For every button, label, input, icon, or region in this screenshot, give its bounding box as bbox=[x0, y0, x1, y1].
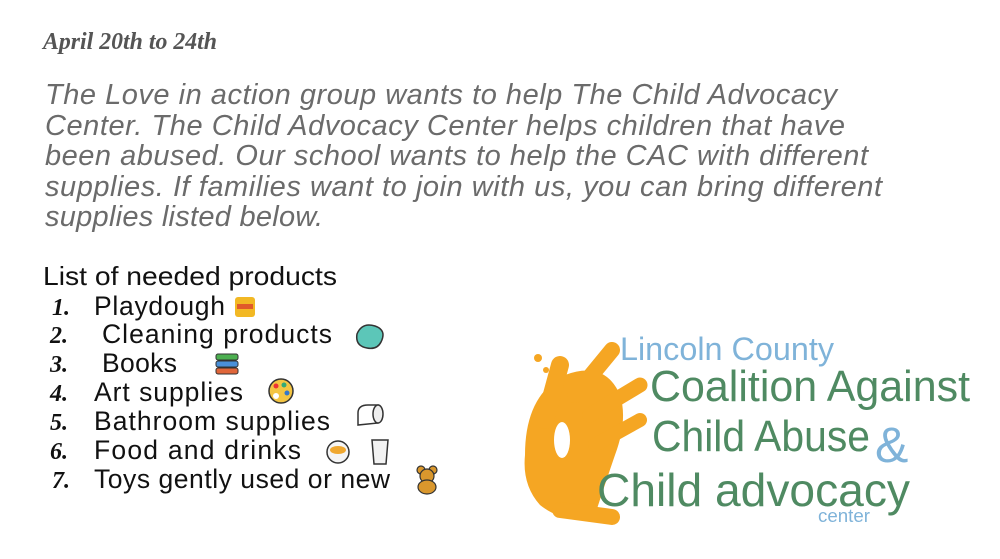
text block: intro paragraph: The Love in action group wants to help The Child Advocacy bbox=[45, 79, 838, 111]
text: Child advocacy: Child advocacy bbox=[597, 464, 910, 516]
icon: books bbox=[216, 354, 238, 374]
list: needed products bbox=[49, 291, 391, 494]
text block: intro paragraph: Center. The Child Advocacy Center helps children that have bbox=[45, 110, 845, 142]
list: needed products: Toys gently used or new bbox=[94, 464, 391, 494]
icon: playdough bbox=[235, 297, 255, 317]
text: center: center bbox=[818, 506, 870, 526]
icon: palette bbox=[269, 379, 293, 403]
list: needed products: Bathroom supplies bbox=[94, 406, 330, 436]
icon: glass of milk bbox=[372, 440, 388, 464]
icon: teddy bear bbox=[417, 466, 437, 494]
logo: Lincoln County Coalition Against Child Abuse & Child Advocacy Center bbox=[525, 331, 970, 526]
list: needed products: Food and drinks bbox=[94, 435, 301, 465]
title: April 20th to 24th bbox=[41, 29, 217, 55]
icon: sponge bbox=[357, 325, 383, 348]
icon: orange handprint bbox=[525, 350, 640, 518]
list: needed products: 3. bbox=[49, 352, 68, 378]
text: Child Abuse: Child Abuse bbox=[652, 412, 870, 461]
list: needed products: Books bbox=[102, 348, 177, 378]
list: needed products: 5. bbox=[50, 410, 68, 436]
list: needed products: Playdough bbox=[94, 291, 225, 321]
text block: intro paragraph: supplies listed below. bbox=[45, 201, 323, 233]
text: ampersand: & bbox=[875, 417, 908, 473]
list: needed products: 1. bbox=[52, 295, 70, 321]
text: Lincoln County: Lincoln County bbox=[620, 331, 834, 367]
text block: intro paragraph bbox=[45, 79, 884, 233]
text block: intro paragraph: been abused. Our school wants to help the CAC with different bbox=[45, 140, 870, 172]
list: needed products: 6. bbox=[50, 439, 68, 465]
list: needed products: 7. bbox=[52, 468, 70, 494]
list: needed products: 4. bbox=[49, 381, 68, 407]
list: needed products: Art supplies bbox=[94, 377, 243, 407]
text block: intro paragraph: supplies. If families want to join with us, you can bring different bbox=[45, 171, 884, 203]
icon: food bowl bbox=[327, 441, 349, 463]
icon: toilet paper bbox=[358, 405, 383, 425]
list heading: List of needed products bbox=[43, 261, 337, 291]
list: needed products: 2. bbox=[49, 323, 68, 349]
text: Coalition Against: Coalition Against bbox=[650, 362, 970, 411]
list: needed products: Cleaning products bbox=[102, 319, 332, 349]
